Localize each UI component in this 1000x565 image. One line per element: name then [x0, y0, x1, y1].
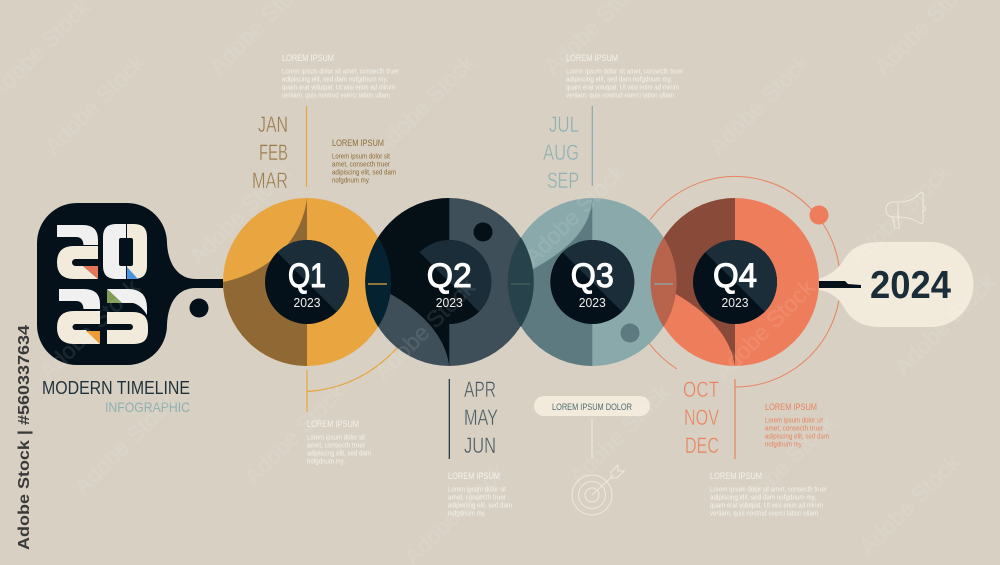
text block: Q2 bottom [448, 471, 512, 518]
panel: Q2 circle [365, 198, 533, 366]
text block: Q1 top: Lorem ipsum dolor sit amet, consecth truer [282, 66, 399, 76]
Q2 months: APR [464, 377, 496, 402]
overlap lens Q2 Q3 [508, 237, 534, 327]
digit 2 bottom [57, 289, 100, 344]
text block: Q1 side: LOREM IPSUM [332, 138, 384, 149]
stock watermark pattern: Adobe Stock [369, 49, 480, 160]
text block: Q2 bottom: LOREM IPSUM [448, 471, 500, 482]
text block: Q1 top: adipiscing elit, sed dam nofgdnum my, [282, 74, 388, 84]
stock watermark pattern: Adobe Stock [69, 389, 180, 500]
text block: Q4 bottom: adipiscing elit, sed dam nofgdnum my, [710, 492, 816, 502]
text block: Q4 side: adipiscing elit, sed dam [765, 432, 829, 440]
stock watermark pattern: Adobe Stock [704, 49, 815, 160]
text block: Q1 bottom: nofgdnum my. [307, 456, 345, 466]
Q3 months [543, 112, 579, 193]
text block: Q1 top [282, 53, 399, 100]
text block: Q1 bottom: Lorem ipsum dolor sit [307, 432, 366, 442]
Q3 dot [620, 324, 640, 342]
Q3 months: JUL [549, 112, 579, 137]
Q4 orbit ring [649, 176, 839, 387]
stock watermark pattern: Adobe Stock [34, 274, 145, 385]
text block: Q3 top: LOREM IPSUM [566, 53, 618, 64]
Q4 months [683, 377, 719, 458]
stock watermark pattern: Adobe Stock [239, 379, 350, 490]
text block: Q4 side: nofgdnum my. [765, 440, 803, 448]
Q2 dot [474, 222, 492, 242]
Q1 inner badge: 2023 [294, 295, 320, 310]
text block: Q1 bottom: LOREM IPSUM [307, 419, 359, 430]
text block: Q1 bottom: amet, consecth truer [307, 440, 365, 450]
stock watermark pattern: Adobe Stock [39, 49, 150, 160]
Q4 inner badge: Q4 [713, 257, 757, 295]
icon: target with arrow [572, 465, 624, 515]
text block: Q2 bottom: adipiscing elit, sed dam [448, 500, 512, 510]
logo title: INFOGRAPHIC [105, 399, 190, 415]
digit 3 [107, 289, 148, 344]
text block: Q3 top: quam erat volutpat. Ut wisi enim ad minim [566, 82, 679, 92]
text block: Q4 bottom [710, 471, 827, 518]
Q2 inner badge: 2023 [436, 295, 463, 310]
stock watermark pattern: Adobe Stock [729, 409, 840, 520]
Q1 inner badge [265, 240, 349, 324]
Q4 months: OCT [683, 377, 719, 402]
Q4 inner badge: 2023 [722, 295, 748, 310]
overlap lens Q3 Q4 [651, 237, 677, 327]
Q1 connector arc [307, 348, 397, 412]
Q2 inner badge [407, 240, 491, 324]
text block: Q1 bottom [307, 419, 371, 466]
text block: Q1 side: adipiscing elit, sed dam [332, 168, 396, 176]
text block: Q4 side: LOREM IPSUM [765, 402, 817, 413]
text block: Q1 side: Lorem ipsum dolor sit [332, 152, 391, 160]
Q2 months: MAY [464, 405, 498, 430]
stock watermark pattern: Adobe Stock [709, 274, 820, 385]
Q3 months: AUG [543, 140, 579, 165]
text block: Q1 side: nofgdnum my. [332, 176, 370, 184]
next year label: 2024 [870, 264, 951, 307]
stock watermark pattern: Adobe Stock [184, 159, 295, 270]
stock watermark pattern: Adobe Stock [519, 159, 630, 270]
logo title: MODERN TIMELINE [42, 378, 190, 398]
Q3 inner badge: 2023 [579, 295, 606, 310]
Q1 months: MAR [252, 168, 288, 193]
Q3 inner badge: Q3 [571, 257, 614, 295]
text block: Q1 side [332, 138, 396, 184]
Q2 inner badge: Q2 [427, 257, 472, 295]
panel: Q4 circle [651, 198, 819, 366]
logo dot [190, 298, 208, 318]
digit 0 [103, 224, 147, 279]
panel: Q1 circle [223, 198, 391, 366]
text block: Q1 top: veniam, quis nostrud exerci tation ullam [282, 90, 390, 100]
Q3 months: SEP [547, 168, 579, 193]
stock watermark pattern: Adobe Stock [854, 449, 965, 560]
text block: Q4 bottom: quam erat volutpat. Ut wisi enim ad minim [710, 500, 823, 510]
Q4 inner badge [693, 240, 777, 324]
Q1 months: JAN [258, 112, 288, 137]
text block: Q4 side: Lorem ipsum dolor sit [765, 416, 824, 424]
pill label [534, 396, 650, 416]
text block: Q4 bottom: veniam, quis nostrud exerci tation ullam [710, 508, 818, 518]
text block: Q3 top [566, 53, 683, 100]
text block: Q4 side [765, 402, 829, 448]
Q1 month divider [306, 106, 308, 187]
Q1 months: FEB [259, 140, 288, 165]
stock watermark pattern: Adobe Stock [889, 269, 1000, 380]
text block: Q1 bottom: adipiscing elit, sed dam [307, 448, 371, 458]
Q4 month divider [734, 379, 736, 459]
Q2 months: JUN [464, 433, 496, 458]
Q1 inner badge: Q1 [288, 257, 326, 295]
text block: Q2 bottom: amet, consecth truer [448, 492, 506, 502]
text block: Q1 top: LOREM IPSUM [282, 53, 334, 64]
panel: Q3 circle [508, 198, 676, 366]
text block: Q4 bottom: LOREM IPSUM [710, 471, 762, 482]
Q3 inner badge [550, 240, 634, 324]
stock id side text: Adobe Stock | #560337634 [16, 325, 33, 550]
pill stem [591, 418, 593, 459]
Q2 month divider [448, 379, 450, 459]
logo handle and badge shape [37, 203, 223, 365]
overlap lens Q1 Q2 [365, 237, 391, 327]
stock watermark pattern: Adobe Stock [564, 379, 675, 490]
bubble pointer [819, 281, 861, 288]
Q1 months [252, 112, 288, 193]
speech bubble 2024 [818, 242, 974, 327]
text block: Q3 top: adipiscing elit, sed dam nofgdnum my, [566, 74, 672, 84]
digit 2 top [57, 225, 98, 279]
icon: megaphone [886, 192, 926, 228]
text block: Q2 bottom: nofgdnum my. [448, 508, 486, 518]
logo title [42, 378, 190, 415]
pill label: LOREM IPSUM DOLOR [552, 402, 632, 413]
text block: Q3 top: veniam, quis nostrud exerci tation ullam [566, 90, 674, 100]
text block: Q4 side: amet, consecth truer [765, 424, 823, 432]
Q4 orbit dot [810, 206, 828, 224]
stock watermark pattern: Adobe Stock [369, 274, 480, 385]
Q2 months [464, 377, 498, 458]
logo: 2023 badge [37, 203, 223, 365]
stock watermark pattern: Adobe Stock [844, 159, 955, 270]
Q3 month divider [591, 106, 593, 186]
text block: Q4 bottom: Lorem ipsum dolor sit amet, consecth truer [710, 484, 827, 494]
text block: Q1 side: amet, consecth truer [332, 160, 390, 168]
Q4 months: NOV [684, 405, 719, 430]
Q4 months: DEC [685, 433, 719, 458]
text block: Q1 top: quam erat volutpat. Ut wisi enim ad minim [282, 82, 395, 92]
text block: Q3 top: Lorem ipsum dolor sit amet, consecth truer [566, 66, 683, 76]
text block: Q2 bottom: Lorem ipsum dolor sit [448, 484, 507, 494]
